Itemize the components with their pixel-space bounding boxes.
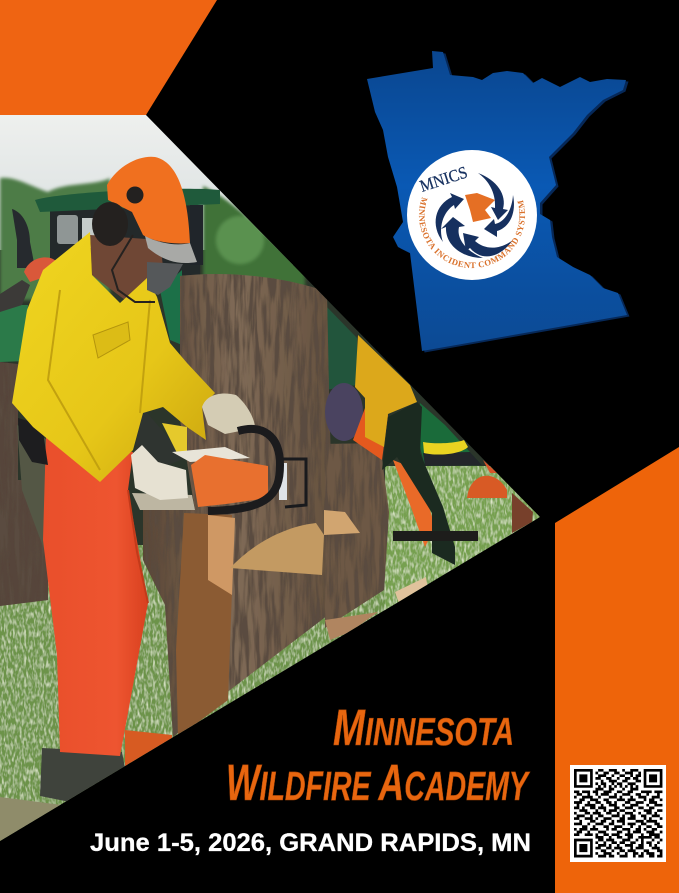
title: Wildfire Academy: WILDFIRE ACADEMY [226,754,531,811]
red marker on ground [483,460,497,473]
title: Minnesota: MINNESOTA [333,699,514,756]
left stump [0,362,48,606]
stacked cut wood [325,612,378,640]
grass field [0,545,400,845]
right grass field [385,466,540,625]
chainsaw bar [132,493,195,510]
trousers [382,402,455,565]
chaps [43,436,148,756]
photo: sawyer cutting a log [0,115,560,845]
chainsaw white strip [279,463,287,500]
QR code [570,765,666,862]
photo background trees [0,175,307,302]
saw on ground [467,476,507,498]
barrel [325,383,363,441]
helmet knob [126,186,144,204]
tractor lower tyre [423,452,482,466]
chainsaw rear frame [282,459,306,507]
background person visor [0,280,30,312]
background tractor [0,189,220,362]
arrow one [478,173,508,220]
ear muff [92,202,128,246]
arrow four [441,217,483,258]
helmet brim [145,236,197,263]
orange side panel [353,408,388,460]
far worker leg [512,493,533,533]
background green behind trunk [325,305,357,390]
worker chaps [393,460,435,547]
arrow three [463,233,513,256]
arrow two [484,195,514,237]
felling notch [230,523,324,575]
saw bar on ground [393,531,478,541]
yellow panel stripe [423,440,468,455]
photo sky [0,115,293,265]
map extrusion [370,52,630,352]
boots [40,748,125,802]
second worker [325,335,533,565]
yellow shirt [12,232,215,482]
glove on handle [202,394,255,434]
ground dirt [0,797,60,841]
shirt [355,335,417,447]
helmet [107,157,190,243]
chainsaw handle [208,429,280,511]
QR modules [574,769,662,857]
background person helmet [24,257,57,282]
chainsaw orange body [191,455,268,507]
left leg behind [17,425,46,548]
visor [147,262,183,295]
logo wordmark: MNICS [417,163,470,196]
pale wood strip [208,515,235,595]
tractor panel [418,403,482,466]
map of Minnesota with logo [367,51,630,352]
chin strap [112,235,155,302]
main worker [12,157,306,802]
map shape [367,51,627,351]
neck and face [90,235,165,300]
main trunk [143,274,332,737]
arrow five [436,193,464,242]
exposed wood on trunk [176,513,232,737]
QR background [570,765,666,862]
logo ring text: MINNESOTA INCIDENT COMMAND SYSTEM [418,196,526,268]
logo mini state [465,193,495,222]
sleeve crease [48,290,150,470]
dark trousers under arm [135,407,186,470]
orange fuel can [125,730,172,766]
white glove on saw [131,445,188,500]
leg crease [128,490,148,603]
yellow tractor patch [162,423,187,452]
date and location: June 1-5, 2026, GRAND RAPIDS, MN [90,829,531,857]
logo circle [407,150,537,280]
second stump [325,443,389,628]
logo arrows [436,173,514,258]
small notch on second stump [324,510,360,535]
panel: right orange shape [555,447,679,893]
shirt pocket [93,322,130,358]
chainsaw top cover [172,447,250,462]
panel: top-left orange shape [0,0,217,115]
tool belt [18,418,48,465]
cut wood chip [395,577,428,602]
photo midground [0,250,560,550]
